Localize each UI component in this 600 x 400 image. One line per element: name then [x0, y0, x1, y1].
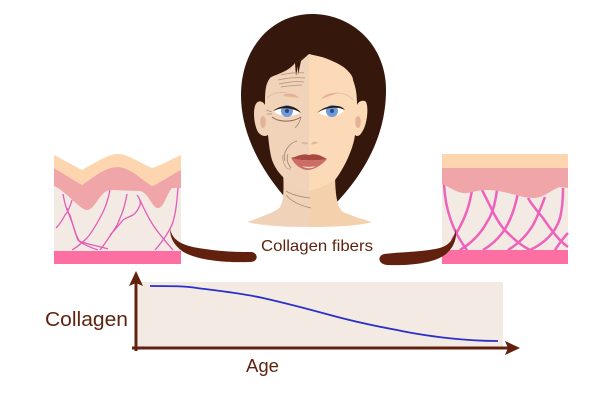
nose	[301, 142, 318, 144]
arrow: right swoosh	[379, 229, 456, 265]
forehead wrinkles	[278, 73, 305, 87]
illustration: face half aged half young	[241, 14, 386, 227]
young half of face	[309, 54, 367, 191]
eyebrows	[267, 92, 353, 100]
dermis base	[54, 180, 181, 251]
chart background	[138, 282, 503, 347]
arrow: left swoosh	[170, 229, 257, 262]
neck and shoulders	[247, 170, 372, 227]
hair strands	[295, 54, 309, 76]
hair	[241, 14, 386, 202]
lips	[291, 154, 327, 170]
base layer	[54, 251, 181, 264]
x axis label: Age	[246, 356, 279, 376]
decline curve	[150, 286, 498, 341]
label: collagen fibers: Collagen fibers	[261, 238, 373, 255]
right eye	[317, 105, 345, 117]
collagen fibers sparse	[56, 188, 178, 250]
line chart: collagen by age	[45, 271, 520, 376]
collagen fibers dense	[444, 184, 568, 250]
dermis base	[442, 180, 568, 251]
y axis	[129, 271, 143, 351]
smile wrinkles	[283, 141, 297, 169]
panel: young skin cross-section	[442, 154, 568, 264]
neck wrinkles	[286, 191, 311, 208]
outer peach layer	[442, 154, 568, 168]
y axis label: Collagen	[45, 309, 128, 331]
x axis	[132, 341, 520, 355]
left eye	[266, 105, 301, 128]
aged half of face	[254, 54, 309, 191]
ear blush	[260, 116, 361, 128]
epidermis pink layer	[54, 167, 181, 210]
base layer	[442, 250, 568, 264]
panel: aged skin cross-section	[54, 154, 181, 264]
epidermis pink layer	[442, 168, 568, 198]
outer peach layer	[54, 154, 181, 186]
